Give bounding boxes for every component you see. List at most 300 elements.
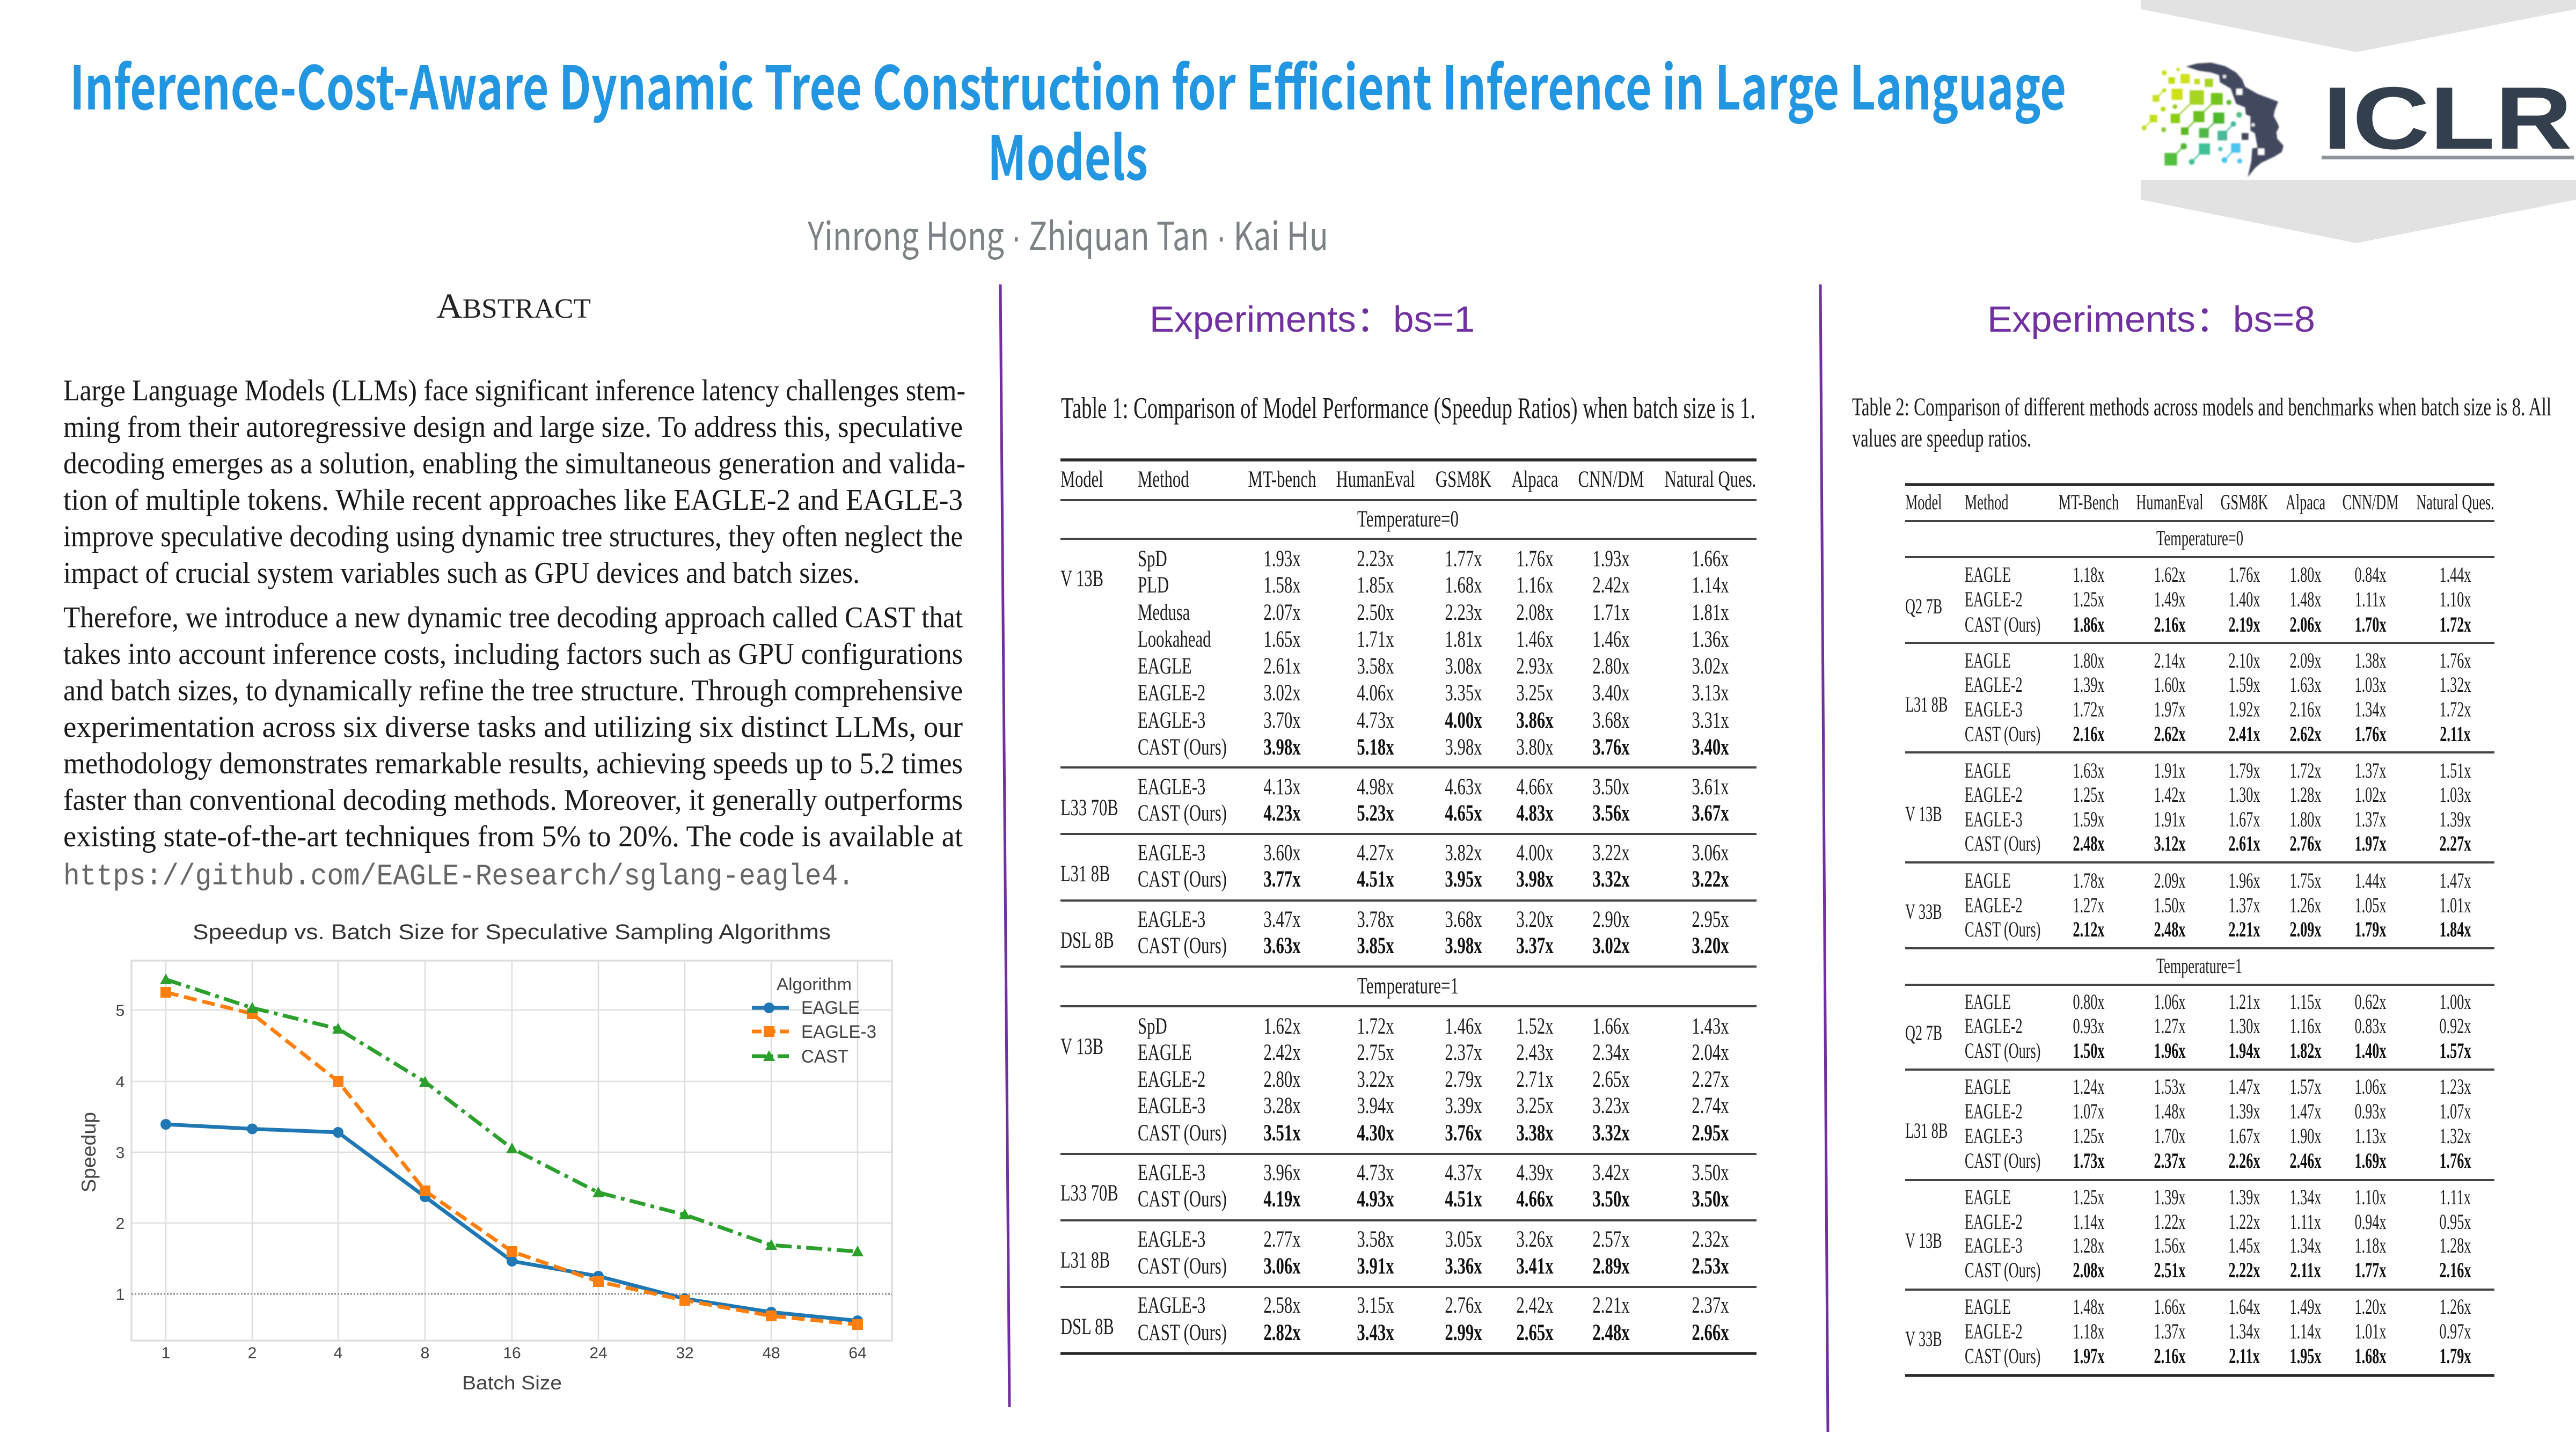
column: method: EAGLE <box>1965 1186 2011 1209</box>
column: MT-bench: 3.77x <box>1263 867 1301 892</box>
column: Alpaca: 1.28x <box>2290 784 2322 807</box>
column: Natural Ques.: 1.01x <box>2440 894 2471 917</box>
column: CNN/DM: 2.21x <box>1592 1293 1630 1318</box>
column: HumanEval: 1.97x <box>2154 698 2186 721</box>
column: Alpaca: 1.63x <box>2290 674 2322 697</box>
column: MT-bench: 4.19x <box>1263 1187 1301 1212</box>
column: CNN/DM: 1.01x <box>2355 1320 2387 1343</box>
column: Natural Ques.: 0.97x <box>2440 1320 2471 1343</box>
column: Natural Ques.: 1.11x <box>2440 1186 2471 1209</box>
column: CNN/DM: 2.80x <box>1592 654 1630 679</box>
column: MT-bench: 3.96x <box>1263 1160 1301 1185</box>
column: Natural Ques.: 1.00x <box>2440 991 2471 1014</box>
column: MT-bench: 2.07x <box>1263 600 1301 625</box>
column: model: V 13B <box>1905 803 1942 826</box>
column: method: Medusa <box>1138 600 1190 625</box>
column: model: Model <box>1060 467 1103 492</box>
column: HumanEval: 4.06x <box>1357 680 1394 706</box>
column: GSM8K: 1.39x <box>2229 1186 2260 1209</box>
column: Alpaca: 2.76x <box>2290 832 2322 855</box>
column: CNN/DM: 2.34x <box>1592 1040 1630 1065</box>
column: method: EAGLE-2 <box>1965 588 2023 611</box>
column: MT-bench: 3.06x <box>1263 1254 1301 1279</box>
column: HumanEval: 2.37x <box>2154 1150 2186 1173</box>
section label: temperature 0: Temperature=0 <box>2156 526 2243 550</box>
column: CNN/DM: 3.68x <box>1592 708 1630 733</box>
column: method: CAST (Ours) <box>1965 1259 2040 1282</box>
column: method: EAGLE <box>1965 869 2011 892</box>
column: HumanEval: 2.50x <box>1357 600 1394 625</box>
column: GSM8K: 2.37x <box>1445 1040 1482 1065</box>
column: Alpaca: 2.46x <box>2290 1150 2322 1173</box>
column: MT-bench: 1.62x <box>1263 1014 1301 1039</box>
column: CNN/DM: 2.42x <box>1592 573 1630 598</box>
column: model <box>1060 467 1118 1340</box>
column: HumanEval: 2.51x <box>2154 1259 2186 1282</box>
column: Natural Ques.: 1.81x <box>1692 600 1729 625</box>
column: method: EAGLE-3 <box>1138 1093 1205 1118</box>
column: GSM8K: 2.79x <box>1445 1067 1482 1092</box>
column: method: PLD <box>1138 573 1169 598</box>
column: GSM8K: 1.34x <box>2229 1320 2260 1343</box>
column: CNN/DM: 1.76x <box>2355 723 2387 746</box>
column: method: CAST (Ours) <box>1965 832 2040 855</box>
column: GSM8K: 1.39x <box>2229 1100 2260 1123</box>
logo wordmark: ICLR <box>2323 69 2572 167</box>
column: method: EAGLE-3 <box>1138 1160 1205 1185</box>
column: method: EAGLE-2 <box>1965 894 2023 917</box>
column: GSM8K: GSM8K <box>1436 467 1491 492</box>
column: Alpaca: 3.86x <box>1516 708 1554 733</box>
column: GSM8K: 3.68x <box>1445 907 1482 932</box>
column: Natural Ques.: 1.03x <box>2440 784 2471 807</box>
column: MT-Bench: 1.28x <box>2073 1234 2105 1257</box>
column: GSM8K: 1.96x <box>2229 869 2260 892</box>
column: Natural Ques.: 1.39x <box>2440 808 2471 831</box>
column: CNN/DM: 1.13x <box>2355 1125 2387 1148</box>
column: Alpaca: 1.90x <box>2290 1125 2322 1148</box>
column: Alpaca: 1.47x <box>2290 1100 2322 1123</box>
table 2 <box>1905 485 2494 1375</box>
column: GSM8K: 1.79x <box>2229 759 2260 782</box>
column: HumanEval: 4.73x <box>1357 708 1394 733</box>
column: HumanEval: 3.22x <box>1357 1067 1394 1092</box>
column: Natural Ques.: 1.76x <box>2440 649 2471 672</box>
column: GSM8K: 2.19x <box>2229 613 2260 636</box>
column: method: EAGLE-2 <box>1965 784 2023 807</box>
column: Natural Ques.: 3.31x <box>1692 708 1729 733</box>
column: MT-bench: 3.47x <box>1263 907 1301 932</box>
column: MT-Bench <box>2059 491 2119 1368</box>
column: MT-bench: 3.70x <box>1263 708 1301 733</box>
column: CNN/DM: 0.93x <box>2355 1100 2387 1123</box>
column: method: CAST (Ours) <box>1965 918 2040 941</box>
column: Alpaca: 1.76x <box>1516 546 1554 572</box>
column: method: EAGLE-3 <box>1138 1227 1205 1252</box>
column: MT-Bench: 1.63x <box>2073 759 2105 782</box>
column: GSM8K: 4.51x <box>1445 1187 1482 1212</box>
column: CNN/DM: 1.37x <box>2355 759 2387 782</box>
column: HumanEval: 3.91x <box>1357 1254 1394 1279</box>
column: CNN/DM: 0.62x <box>2355 991 2387 1014</box>
column: GSM8K: 1.94x <box>2229 1040 2260 1063</box>
column: model: L33 70B <box>1060 795 1118 821</box>
column: GSM8K: 3.39x <box>1445 1093 1482 1118</box>
column: CNN/DM: 3.42x <box>1592 1160 1630 1185</box>
column: Natural Ques.: 1.57x <box>2440 1040 2471 1063</box>
column: HumanEval: 1.85x <box>1357 573 1394 598</box>
column: method: CAST (Ours) <box>1138 801 1227 826</box>
column: method: CAST (Ours) <box>1138 867 1227 892</box>
column: GSM8K: 1.92x <box>2229 698 2260 721</box>
column: HumanEval: 1.96x <box>2154 1040 2186 1063</box>
column: Natural Ques.: 1.43x <box>1692 1014 1729 1039</box>
column: MT-bench: 4.23x <box>1263 801 1301 826</box>
column: HumanEval: 1.91x <box>2154 808 2186 831</box>
column: HumanEval: 2.75x <box>1357 1040 1394 1065</box>
column: GSM8K: 2.99x <box>1445 1320 1482 1345</box>
column: CNN/DM: 2.65x <box>1592 1067 1630 1092</box>
column: Natural Ques.: 1.32x <box>2440 674 2471 697</box>
column: GSM8K: 4.63x <box>1445 774 1482 800</box>
text block: abstract: existing state-of-the-art techniques from 5% to 20%. The code is available at <box>63 820 963 853</box>
column: method: EAGLE <box>1965 1075 2011 1099</box>
column: HumanEval: 1.62x <box>2154 564 2186 587</box>
column: Natural Ques.: 2.95x <box>1692 1121 1729 1146</box>
column: Natural Ques.: 3.67x <box>1692 801 1729 826</box>
column: GSM8K: 3.08x <box>1445 654 1482 679</box>
chart title: Speedup vs. Batch Size for Speculative Sampling Algorithms <box>193 920 831 944</box>
column: GSM8K: 3.98x <box>1445 933 1482 958</box>
column: HumanEval: 3.43x <box>1357 1320 1394 1345</box>
column: Natural Ques.: 2.32x <box>1692 1227 1729 1252</box>
column: Alpaca: 1.49x <box>2290 1296 2322 1319</box>
column: HumanEval: 1.60x <box>2154 674 2186 697</box>
column: method: EAGLE <box>1965 991 2011 1014</box>
column: HumanEval: 1.53x <box>2154 1075 2186 1099</box>
column: GSM8K: 1.59x <box>2229 674 2260 697</box>
column: CNN/DM: 3.76x <box>1592 735 1630 760</box>
column: Alpaca: 4.66x <box>1516 1187 1554 1212</box>
column: Natural Ques.: 1.26x <box>2440 1296 2471 1319</box>
column: HumanEval: 2.62x <box>2154 723 2186 746</box>
column: MT-bench: 1.58x <box>1263 573 1301 598</box>
text block: abstract: https://github.com/EAGLE-Research/sglang-eagle4. <box>63 859 854 894</box>
column: MT-bench: 2.42x <box>1263 1040 1301 1065</box>
column: Alpaca: 3.38x <box>1516 1121 1554 1146</box>
column: GSM8K: 3.35x <box>1445 680 1482 706</box>
column: method: EAGLE-3 <box>1965 1125 2023 1148</box>
column: HumanEval <box>2136 491 2204 1368</box>
column: Alpaca: 2.06x <box>2290 613 2322 636</box>
line chart: speedup vs batch size <box>78 920 892 1394</box>
column: method: SpD <box>1138 546 1167 572</box>
column: GSM8K: 1.77x <box>1445 546 1482 572</box>
column: MT-Bench: 2.48x <box>2073 832 2105 855</box>
column: Natural Ques. <box>2416 491 2494 1368</box>
column: Alpaca: Alpaca <box>1511 467 1558 492</box>
column: Natural Ques.: 1.72x <box>2440 613 2471 636</box>
column: MT-bench: 3.51x <box>1263 1121 1301 1146</box>
column: HumanEval: 4.27x <box>1357 840 1394 866</box>
column: HumanEval: 1.49x <box>2154 588 2186 611</box>
column: Alpaca: 2.08x <box>1516 600 1554 625</box>
column: CNN/DM: 1.05x <box>2355 894 2387 917</box>
column: method: CAST (Ours) <box>1138 1121 1227 1146</box>
column: MT-bench: 1.65x <box>1263 627 1301 652</box>
column: model: L31 8B <box>1060 1248 1110 1273</box>
column: Natural Ques.: 1.14x <box>1692 573 1729 598</box>
column: method: EAGLE <box>1138 654 1192 679</box>
column: CNN/DM: 3.22x <box>1592 840 1630 866</box>
authors: Yinrong Hong · Zhiquan Tan · Kai Hu <box>807 205 1328 261</box>
column: model: DSL 8B <box>1060 1314 1114 1340</box>
column: Alpaca: 3.41x <box>1516 1254 1554 1279</box>
column: method: EAGLE-2 <box>1965 1211 2023 1234</box>
column: MT-Bench: 1.78x <box>2073 869 2105 892</box>
column: Natural Ques.: 1.36x <box>1692 627 1729 652</box>
column: Alpaca: 1.34x <box>2290 1234 2322 1257</box>
column: GSM8K: 2.22x <box>2229 1259 2260 1282</box>
column: MT-Bench: 1.25x <box>2073 588 2105 611</box>
column: Alpaca: 1.16x <box>1516 573 1554 598</box>
column: Natural Ques.: 3.20x <box>1692 933 1729 958</box>
column: Natural Ques.: Natural Ques. <box>1665 467 1756 492</box>
column: GSM8K: 1.45x <box>2229 1234 2260 1257</box>
column: GSM8K: 4.65x <box>1445 801 1482 826</box>
section label: temperature 0: Temperature=0 <box>1357 507 1459 532</box>
column: Natural Ques.: 2.11x <box>2440 723 2471 746</box>
column: Alpaca: 1.16x <box>2290 1015 2322 1038</box>
column: MT-Bench: 1.25x <box>2073 1125 2105 1148</box>
text block: abstract: tion of multiple tokens. While recent approaches like EAGLE-2 and EAGLE-3 <box>63 484 963 517</box>
column: Natural Ques.: 2.16x <box>2440 1259 2471 1282</box>
column: HumanEval: 2.16x <box>2154 1345 2186 1368</box>
column: GSM8K: GSM8K <box>2221 491 2268 514</box>
column: HumanEval: 2.09x <box>2154 869 2186 892</box>
x axis labels: 8 <box>421 1344 429 1362</box>
column: CNN/DM: 2.48x <box>1592 1320 1630 1345</box>
column: CNN/DM <box>2343 491 2398 1368</box>
column: Natural Ques.: 3.50x <box>1692 1187 1729 1212</box>
column: MT-bench: 2.58x <box>1263 1293 1301 1318</box>
column: Natural Ques.: 1.79x <box>2440 1345 2471 1368</box>
column: HumanEval: 1.66x <box>2154 1296 2186 1319</box>
column: CNN/DM: 3.50x <box>1592 1187 1630 1212</box>
column: method: EAGLE-2 <box>1138 680 1205 706</box>
column: Alpaca: 4.66x <box>1516 774 1554 800</box>
column: Natural Ques.: 3.13x <box>1692 680 1729 706</box>
column: HumanEval: 3.12x <box>2154 832 2186 855</box>
series: CAST <box>160 974 863 1256</box>
column: Alpaca: 1.80x <box>2290 808 2322 831</box>
column: Alpaca: 3.98x <box>1516 867 1554 892</box>
column: MT-bench: 1.93x <box>1263 546 1301 572</box>
column: Alpaca <box>1511 467 1558 1345</box>
column: MT-Bench: 1.73x <box>2073 1150 2105 1173</box>
y axis labels: 3 <box>116 1144 125 1162</box>
column: Alpaca: 1.34x <box>2290 1186 2322 1209</box>
column: method: SpD <box>1138 1014 1167 1039</box>
column: HumanEval: 5.18x <box>1357 735 1394 760</box>
x axis labels: 2 <box>248 1344 257 1362</box>
column: Alpaca: 1.14x <box>2290 1320 2322 1343</box>
section label: temperature 1: Temperature=1 <box>1357 974 1459 999</box>
column: HumanEval: 1.70x <box>2154 1125 2186 1148</box>
column: model: V 33B <box>1905 901 1942 924</box>
column: Natural Ques.: 1.47x <box>2440 869 2471 892</box>
column: method: EAGLE-2 <box>1965 1320 2023 1343</box>
text block: abstract: improve speculative decoding using dynamic tree structures, they often neglect the <box>63 520 963 553</box>
column: MT-Bench: 1.07x <box>2073 1100 2105 1123</box>
column: Alpaca: 2.93x <box>1516 654 1554 679</box>
column: Natural Ques.: 1.51x <box>2440 759 2471 782</box>
column: GSM8K: 2.41x <box>2229 723 2260 746</box>
column: GSM8K: 1.64x <box>2229 1296 2260 1319</box>
column: HumanEval: 2.48x <box>2154 918 2186 941</box>
column: model: L31 8B <box>1905 693 1948 716</box>
column: Alpaca: 1.11x <box>2290 1211 2321 1234</box>
column: CNN/DM: 0.94x <box>2355 1211 2387 1234</box>
column: HumanEval: 1.22x <box>2154 1211 2186 1234</box>
x axis title: Batch Size <box>462 1372 562 1394</box>
text block: abstract: and batch sizes, to dynamically refine the tree structure. Through comprehensive <box>63 674 963 707</box>
column: MT-Bench: 1.14x <box>2073 1211 2105 1234</box>
column: CNN/DM: CNN/DM <box>2343 491 2398 514</box>
heading: experiments bs=1: Experiments：bs=1 <box>1150 299 1475 340</box>
column: MT-bench: 2.61x <box>1263 654 1301 679</box>
column: MT-Bench: 2.08x <box>2073 1259 2105 1282</box>
column: GSM8K: 2.11x <box>2229 1345 2260 1368</box>
column: MT-bench: 4.13x <box>1263 774 1301 800</box>
column: Alpaca: 2.09x <box>2290 649 2322 672</box>
column: HumanEval: 3.78x <box>1357 907 1394 932</box>
table caption 2: values are speedup ratios. <box>1852 424 2031 452</box>
column: CNN/DM: 1.66x <box>1592 1014 1630 1039</box>
column: Alpaca: 2.11x <box>2290 1259 2321 1282</box>
column: Alpaca: 2.65x <box>1516 1320 1554 1345</box>
legend: EAGLE <box>801 998 860 1018</box>
icon: head made of circuit squares <box>2142 63 2284 177</box>
column: GSM8K: 1.37x <box>2229 894 2260 917</box>
legend: EAGLE-3 <box>801 1022 876 1042</box>
column: MT-bench: 3.98x <box>1263 735 1301 760</box>
column: CNN/DM: 1.68x <box>2355 1345 2387 1368</box>
column: Natural Ques.: 3.61x <box>1692 774 1729 800</box>
x axis labels: 32 <box>676 1344 694 1362</box>
column: Alpaca: 3.26x <box>1516 1227 1554 1252</box>
column: method: EAGLE-2 <box>1965 674 2023 697</box>
column: Natural Ques.: 1.76x <box>2440 1150 2471 1173</box>
column: method: EAGLE-3 <box>1138 708 1205 733</box>
column: Alpaca: 3.25x <box>1516 680 1554 706</box>
column: Alpaca: 1.75x <box>2290 869 2322 892</box>
column: CNN/DM: 1.18x <box>2355 1234 2387 1257</box>
column: method: EAGLE <box>1965 1296 2011 1319</box>
column: Natural Ques.: 2.27x <box>2440 832 2471 855</box>
column: method: EAGLE-3 <box>1138 907 1205 932</box>
x axis labels: 24 <box>589 1344 608 1362</box>
column: method: EAGLE-2 <box>1965 1015 2023 1038</box>
column: CNN/DM: 1.97x <box>2355 832 2387 855</box>
column: model: L33 70B <box>1060 1181 1118 1206</box>
column: GSM8K: 1.21x <box>2229 991 2260 1014</box>
column: model: L31 8B <box>1060 861 1110 887</box>
column: HumanEval: 3.85x <box>1357 933 1394 958</box>
column: HumanEval <box>1336 467 1415 1345</box>
legend: CAST <box>801 1046 848 1067</box>
column: GSM8K: 3.05x <box>1445 1227 1482 1252</box>
column: Natural Ques.: 2.04x <box>1692 1040 1729 1065</box>
column: CNN/DM: 0.83x <box>2355 1015 2387 1038</box>
column: method: EAGLE <box>1965 759 2011 782</box>
column: Alpaca: 2.71x <box>1516 1067 1554 1092</box>
column: CNN/DM: 1.06x <box>2355 1075 2387 1099</box>
column: model: Q2 7B <box>1905 1022 1942 1045</box>
column: HumanEval: 3.58x <box>1357 1227 1394 1252</box>
y axis labels <box>116 1002 125 1304</box>
column: HumanEval: 4.30x <box>1357 1121 1394 1146</box>
column: model: V 13B <box>1905 1230 1942 1253</box>
table 1 <box>1060 460 1757 1353</box>
column: HumanEval: 4.73x <box>1357 1160 1394 1185</box>
column: Alpaca: 2.62x <box>2290 723 2322 746</box>
heading: abstract: ABSTRACT <box>436 287 591 326</box>
column: CNN/DM: 1.69x <box>2355 1150 2387 1173</box>
text block: abstract: experimentation across six diverse tasks and utilizing six distinct LLMs, our <box>63 711 963 744</box>
x axis labels <box>162 1344 867 1362</box>
column: MT-Bench: 1.48x <box>2073 1296 2105 1319</box>
column: CNN/DM: 1.37x <box>2355 808 2387 831</box>
column: CNN/DM: 1.46x <box>1592 627 1630 652</box>
column: CNN/DM: 1.11x <box>2355 588 2386 611</box>
column: GSM8K <box>2221 491 2268 1368</box>
column: GSM8K: 2.10x <box>2229 649 2260 672</box>
column: method: CAST (Ours) <box>1965 1150 2040 1173</box>
column: model: V 33B <box>1905 1328 1942 1351</box>
column: method: CAST (Ours) <box>1138 1320 1227 1345</box>
column: GSM8K: 2.21x <box>2229 918 2260 941</box>
column: Natural Ques.: 1.07x <box>2440 1100 2471 1123</box>
column: HumanEval: 4.98x <box>1357 774 1394 800</box>
column: method: EAGLE <box>1965 564 2011 587</box>
table caption 2 <box>1852 393 2551 452</box>
column: CNN/DM: 3.56x <box>1592 801 1630 826</box>
x axis labels: 4 <box>334 1344 342 1362</box>
text block: abstract: decoding emerges as a solution, enabling the simultaneous generation and valida- <box>63 447 965 480</box>
column: GSM8K: 3.76x <box>1445 1121 1482 1146</box>
column: HumanEval: 3.94x <box>1357 1093 1394 1118</box>
text block: abstract: Therefore, we introduce a new dynamic tree decoding approach called CAST that <box>63 601 963 634</box>
column: CNN/DM: 2.89x <box>1592 1254 1630 1279</box>
column: CNN/DM: 1.79x <box>2355 918 2387 941</box>
column: MT-bench: 3.28x <box>1263 1093 1301 1118</box>
column: MT-Bench: 1.50x <box>2073 1040 2105 1063</box>
column: GSM8K <box>1436 467 1491 1345</box>
column: MT-Bench: 1.18x <box>2073 564 2105 587</box>
column: MT-Bench: 2.12x <box>2073 918 2105 941</box>
column: CNN/DM <box>1578 467 1644 1345</box>
column: GSM8K: 1.67x <box>2229 1125 2260 1148</box>
column: CNN/DM: 1.77x <box>2355 1259 2387 1282</box>
column: Alpaca: 4.83x <box>1516 801 1554 826</box>
legend: Algorithm <box>777 975 852 994</box>
column: Natural Ques.: 3.40x <box>1692 735 1729 760</box>
column: MT-Bench: 1.25x <box>2073 1186 2105 1209</box>
column: CNN/DM: 1.44x <box>2355 869 2387 892</box>
column: MT-bench: 2.82x <box>1263 1320 1301 1345</box>
column: Alpaca <box>2286 491 2325 1368</box>
